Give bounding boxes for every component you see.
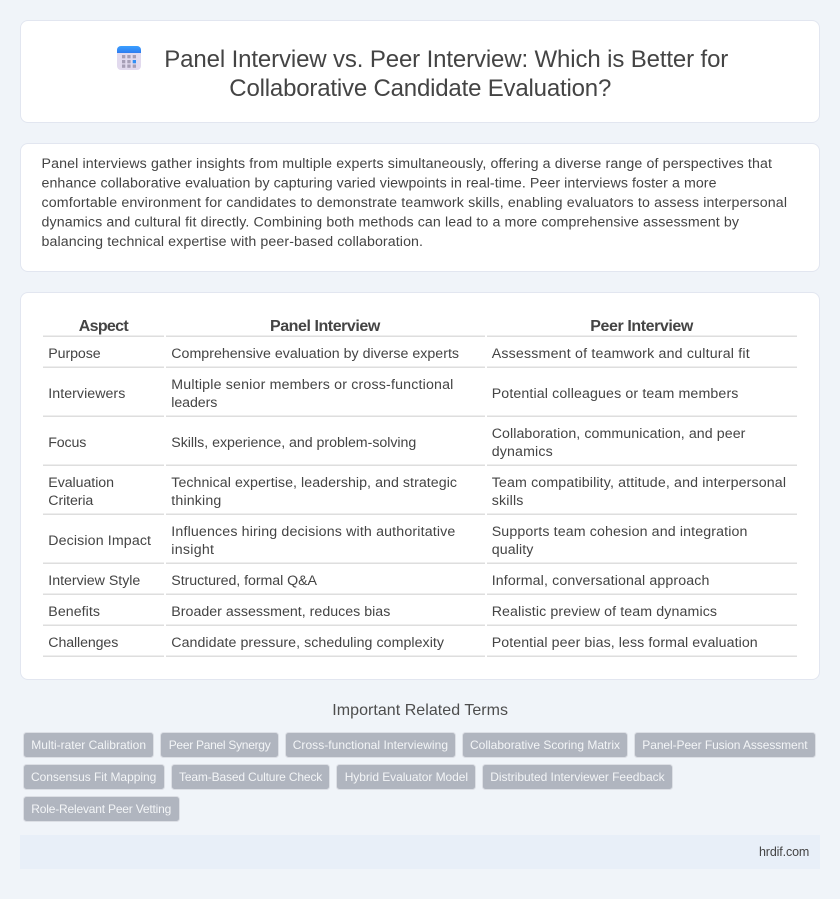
table header row: Aspect [79,318,129,335]
intro text: comfortable environment for candidates to demonstrate teamwork skills, enabling evaluators to assess interpersonal [42,195,787,211]
row: purpose: Comprehensive evaluation by diverse experts [171,346,459,362]
related terms tags: Team-Based Culture Check [179,770,323,784]
intro text: balancing technical expertise with peer-based collaboration. [42,234,423,250]
row: evaluation criteria: Criteria [48,493,93,509]
related terms tags: Panel-Peer Fusion Assessment [642,738,808,752]
header panel [20,20,820,123]
row: benefits: Benefits [48,604,100,620]
title: Collaborative Candidate Evaluation? [229,75,611,102]
intro text: Panel interviews gather insights from multiple experts simultaneously, offering a diverse range of perspectives that [42,156,772,172]
row: evaluation criteria [48,475,786,509]
row: challenges: Candidate pressure, scheduling complexity [171,635,445,651]
footer source text: hrdif.com [759,845,809,859]
related terms tags: Cross-functional Interviewing [293,738,448,752]
row: challenges [48,635,758,651]
intro panel [20,143,820,272]
related terms tags [24,732,816,822]
related terms heading: Important Related Terms [332,702,508,719]
row: evaluation criteria: Technical expertise, leadership, and strategic [171,475,457,491]
intro text: dynamics and cultural fit directly. Combining both methods can lead to a more comprehensive assessment by [42,214,740,230]
row: decision impact: Decision Impact [48,533,151,549]
intro text [42,156,787,250]
row: focus [48,426,746,460]
row: evaluation criteria: Team compatibility, attitude, and interpersonal [492,475,786,491]
row: benefits: Broader assessment, reduces bias [171,604,390,620]
row: evaluation criteria: Evaluation [48,475,114,491]
row: purpose: Purpose [48,346,101,362]
row: purpose [48,346,750,362]
row: evaluation criteria: skills [492,493,523,509]
row: challenges: Potential peer bias, less formal evaluation [492,635,758,651]
row: interviewers: Multiple senior members or cross-functional [171,377,453,393]
row: interview style: Structured, formal Q&A [171,573,318,589]
row: focus: Skills, experience, and problem-solving [171,435,416,451]
row: interview style: Informal, conversational approach [492,573,709,589]
row: interviewers: leaders [171,395,217,411]
row: decision impact: insight [171,542,214,558]
table header row [79,318,694,335]
row: benefits: Realistic preview of team dynamics [492,604,717,620]
table header row: Peer Interview [590,318,694,335]
table rules [43,336,797,657]
row: benefits [48,604,717,620]
row: focus: Collaboration, communication, and peer [492,426,746,442]
icon: calendar [117,46,141,70]
row: evaluation criteria: thinking [171,493,221,509]
row: interviewers: Interviewers [48,386,125,402]
intro text: enhance collaborative evaluation by capturing varied viewpoints in real-time. Peer interviews foster a more [42,176,717,192]
row: focus: dynamics [492,444,553,460]
row: challenges: Challenges [48,635,118,651]
related terms tags: Collaborative Scoring Matrix [470,738,620,752]
row: interviewers [48,377,738,411]
footer bar [20,835,820,869]
related terms tags: Multi-rater Calibration [31,738,146,752]
row: interview style: Interview Style [48,573,140,589]
table header row: Panel Interview [270,318,381,335]
row: decision impact [48,524,747,558]
row: purpose: Assessment of teamwork and cultural fit [492,346,750,362]
related terms tags: Peer Panel Synergy [169,738,271,752]
related terms tags: Distributed Interviewer Feedback [490,770,666,784]
row: focus: Focus [48,435,86,451]
comparison table panel [20,292,820,680]
row: decision impact: quality [492,542,534,558]
row: decision impact: Influences hiring decisions with authoritative [171,524,455,540]
title: Panel Interview vs. Peer Interview: Which is Better for [164,46,728,73]
row: interviewers: Potential colleagues or team members [492,386,738,402]
title [164,46,728,102]
related terms tags: Consensus Fit Mapping [31,770,156,784]
related terms tags: Role-Relevant Peer Vetting [31,802,171,816]
row: interview style [48,573,709,589]
row: decision impact: Supports team cohesion and integration [492,524,747,540]
related terms tags: Hybrid Evaluator Model [345,770,468,784]
